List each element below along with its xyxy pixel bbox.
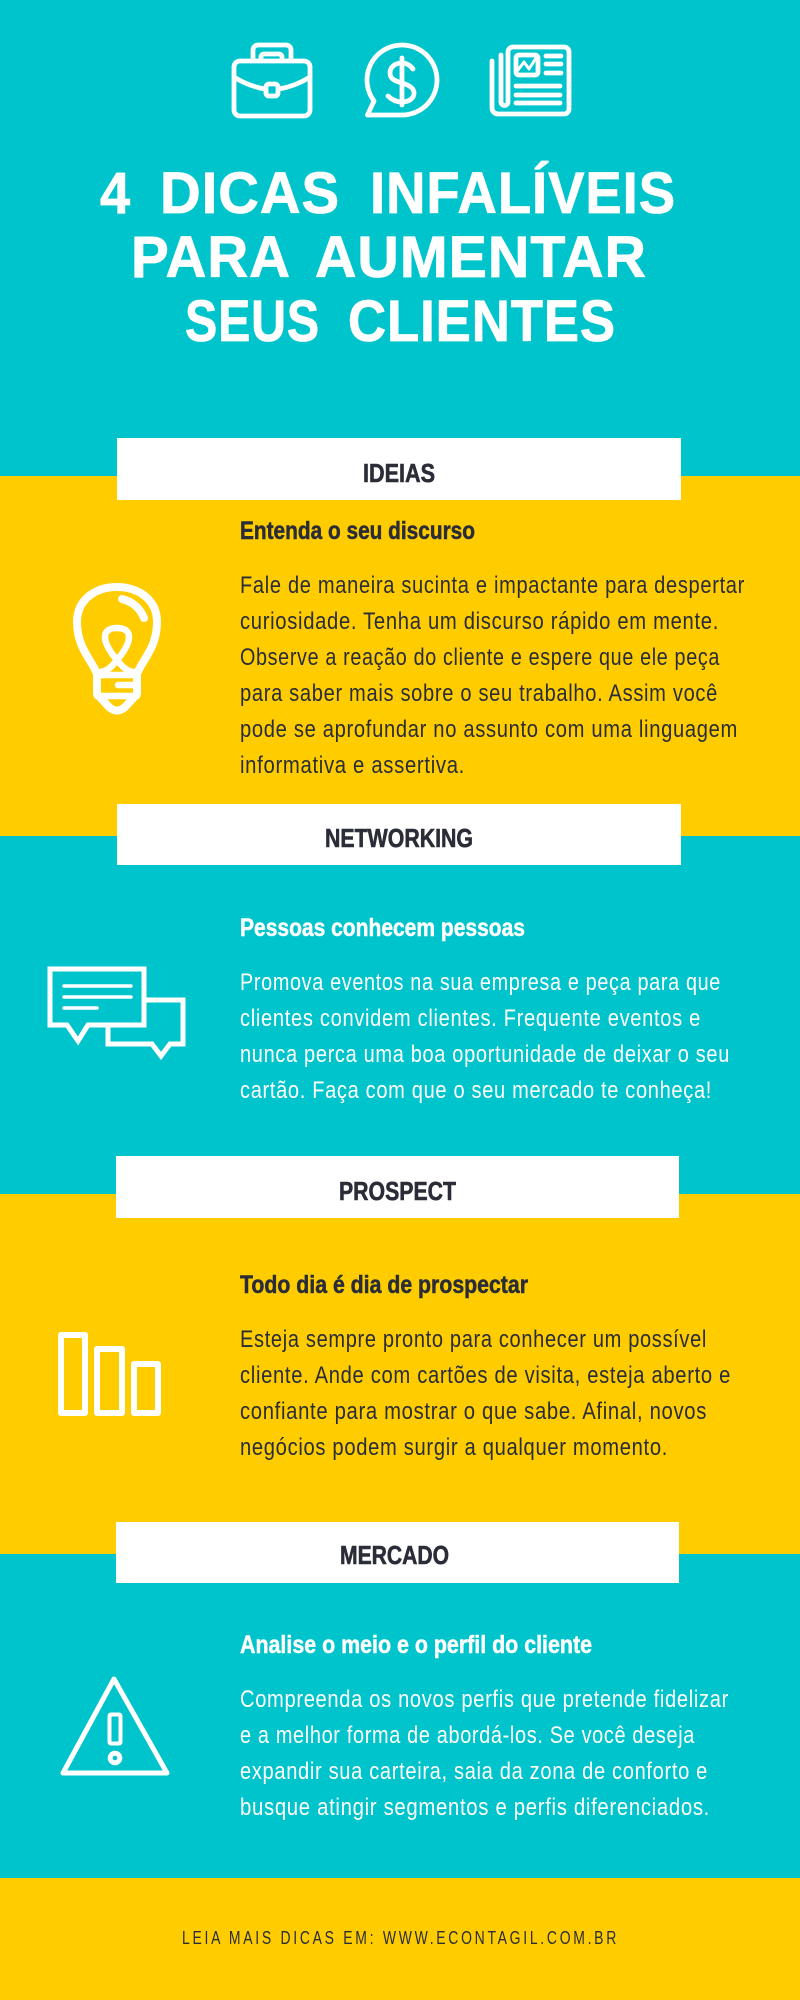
icon: light bulb [77, 587, 157, 710]
body text: confiante para mostrar o que sabe. Afinal, novos [240, 1398, 707, 1425]
subheading: Entenda o seu discurso [240, 517, 475, 545]
body text: e a melhor forma de abordá-los. Se você deseja [240, 1722, 695, 1749]
title: DICAS [160, 161, 340, 226]
panel: mercado [0, 1522, 800, 1878]
body text [240, 969, 730, 1104]
body text [240, 572, 745, 779]
label box [116, 1156, 679, 1218]
body text: busque atingir segmentos e perfis diferenciados. [240, 1794, 710, 1821]
label box [116, 1522, 679, 1583]
section background [0, 476, 800, 836]
title: INFALÍVEIS [370, 161, 676, 226]
panel: networking [0, 804, 800, 1194]
body text: clientes convidem clientes. Frequente eventos e [240, 1005, 701, 1032]
footer background [0, 1878, 800, 2000]
section background [0, 836, 800, 1194]
body text: informativa e assertiva. [240, 752, 465, 779]
label box [117, 438, 681, 500]
icon: briefcase [234, 45, 310, 116]
label box [117, 804, 681, 865]
title: 4 [100, 161, 131, 226]
section background [0, 1554, 800, 1878]
icon: chat bubbles [50, 969, 183, 1056]
title: CLIENTES [348, 289, 616, 354]
section background [0, 1194, 800, 1554]
body text [240, 1326, 731, 1461]
title: AUMENTAR [315, 225, 647, 290]
title: PARA [131, 225, 291, 290]
icon: newspaper [492, 47, 569, 114]
body text: curiosidade. Tenha um discurso rápido em mente. [240, 608, 719, 635]
body text [240, 1686, 729, 1821]
title: SEUS [185, 289, 320, 354]
label: PROSPECT [339, 1176, 456, 1206]
icon: bar chart [61, 1335, 158, 1413]
footer text: LEIA MAIS DICAS EM: WWW.ECONTAGIL.COM.BR [182, 1928, 619, 1948]
panel: prospect [0, 1156, 800, 1554]
subheading: Analise o meio e o perfil do cliente [240, 1631, 592, 1659]
subheading: Pessoas conhecem pessoas [240, 914, 525, 942]
body text: negócios podem surgir a qualquer momento. [240, 1434, 668, 1461]
title [100, 161, 676, 354]
icon: dollar speech bubble [367, 45, 437, 115]
body text: cartão. Faça com que o seu mercado te conheça! [240, 1077, 712, 1104]
body text: para saber mais sobre o seu trabalho. Assim você [240, 680, 718, 707]
panel: ideias [0, 438, 800, 836]
label: IDEIAS [363, 458, 435, 488]
label: MERCADO [340, 1540, 449, 1570]
subheading: Todo dia é dia de prospectar [240, 1271, 528, 1299]
body text: Esteja sempre pronto para conhecer um possível [240, 1326, 707, 1353]
icon: warning triangle [63, 1679, 167, 1773]
body text: expandir sua carteira, saia da zona de conforto e [240, 1758, 708, 1785]
panel: header background [0, 0, 800, 476]
panel: footer [0, 1878, 800, 2000]
label: NETWORKING [325, 823, 473, 853]
